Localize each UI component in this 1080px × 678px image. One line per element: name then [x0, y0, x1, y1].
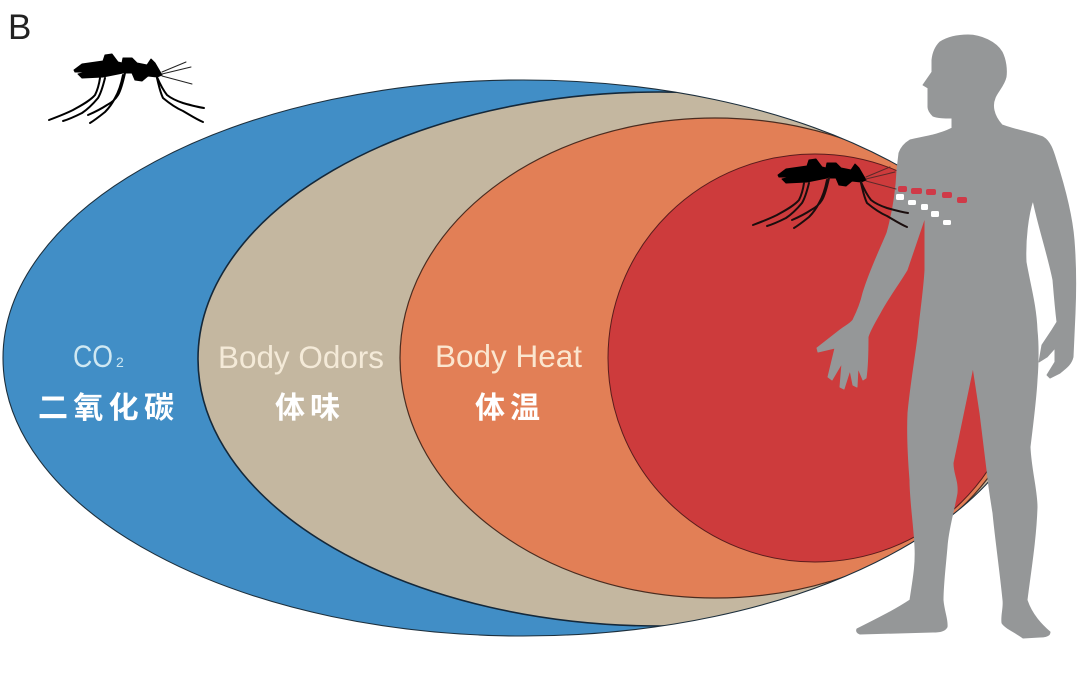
text: Body Heat Chinese label: 体温	[475, 392, 540, 425]
zone: CO2 (blue ellipse)	[4, 80, 668, 636]
icon: mosquito far from host	[49, 54, 204, 123]
text: Body Odors Chinese label: 体味	[275, 392, 340, 425]
icon: mosquito on host	[753, 159, 908, 228]
dashed path: red heat marks	[898, 186, 967, 203]
text: Body Odors label: Body Odors	[218, 339, 384, 375]
zone: closest range (red ellipse)	[608, 154, 1022, 562]
zones clipped to the outer ellipse	[198, 92, 1080, 626]
panel label: B: B	[8, 8, 31, 47]
zone outline	[3, 80, 1043, 636]
icon: human silhouette	[817, 35, 1076, 638]
text: CO2 subscript: 2	[116, 354, 124, 370]
dashed path: white contact marks	[896, 194, 951, 225]
zone: body heat (orange ellipse)	[400, 118, 1030, 598]
text: CO2 Chinese label: 二氧化碳	[38, 392, 174, 425]
text: Body Heat label: Body Heat	[435, 338, 582, 374]
text: CO2 label: CO	[73, 338, 113, 374]
zone: body odors (beige ellipse)	[198, 92, 1080, 626]
